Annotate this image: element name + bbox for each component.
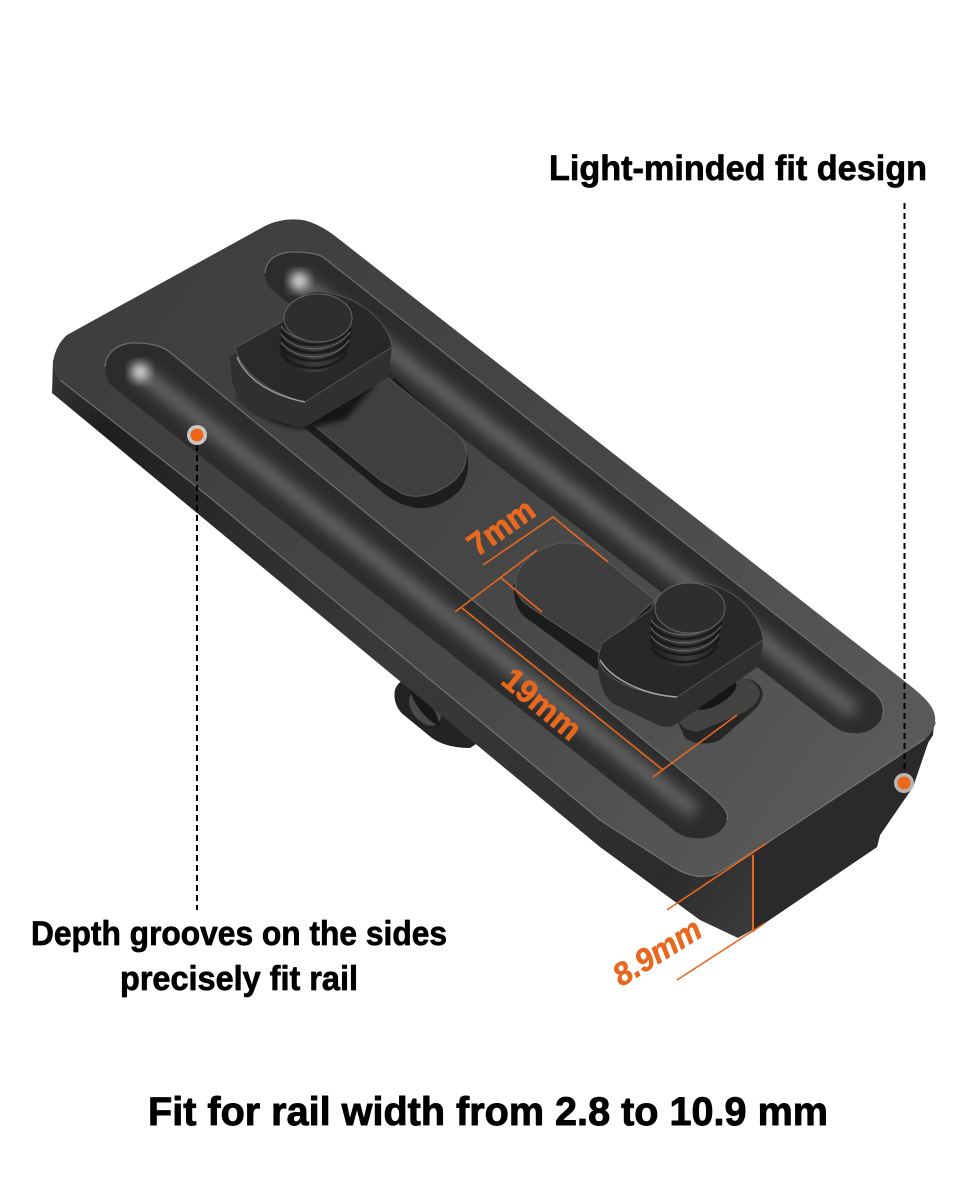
underside mount loop <box>394 678 490 748</box>
bottom caption: Fit for rail width from 2.8 to 10.9 mm <box>148 1090 828 1134</box>
label: depth grooves: Depth grooves on the sides <box>31 915 447 953</box>
groove: long left slot <box>105 343 728 838</box>
bolt 1 <box>280 294 352 373</box>
slider pad 1 <box>305 378 468 508</box>
dimension: 19mm <box>462 608 737 777</box>
bolt 2 <box>650 583 725 666</box>
dimension: 7mm: 7mm <box>460 491 542 563</box>
dimension: 7mm <box>455 491 608 612</box>
callout: right leader <box>894 203 914 793</box>
dimension: 8.9mm: 8.9mm <box>606 911 708 993</box>
slider pad 2 <box>513 543 660 670</box>
plate side wall <box>52 360 936 938</box>
label: light-minded fit design: Light-minded fit design <box>549 149 927 188</box>
nut 1 with washer shadow <box>230 292 392 429</box>
washer 2 <box>677 678 763 744</box>
label: depth grooves: precisely fit rail <box>120 960 358 998</box>
plate top face <box>53 219 935 876</box>
dimension: 8.9mm <box>606 843 767 993</box>
callout: left leader <box>187 425 207 910</box>
dimension: 19mm: 19mm <box>495 661 589 747</box>
label: depth grooves <box>31 915 447 998</box>
groove: upper right slot <box>265 252 884 733</box>
top face edge highlight <box>60 380 925 876</box>
nut 2 <box>598 582 763 727</box>
product: bipod rail adapter plate <box>52 219 936 938</box>
